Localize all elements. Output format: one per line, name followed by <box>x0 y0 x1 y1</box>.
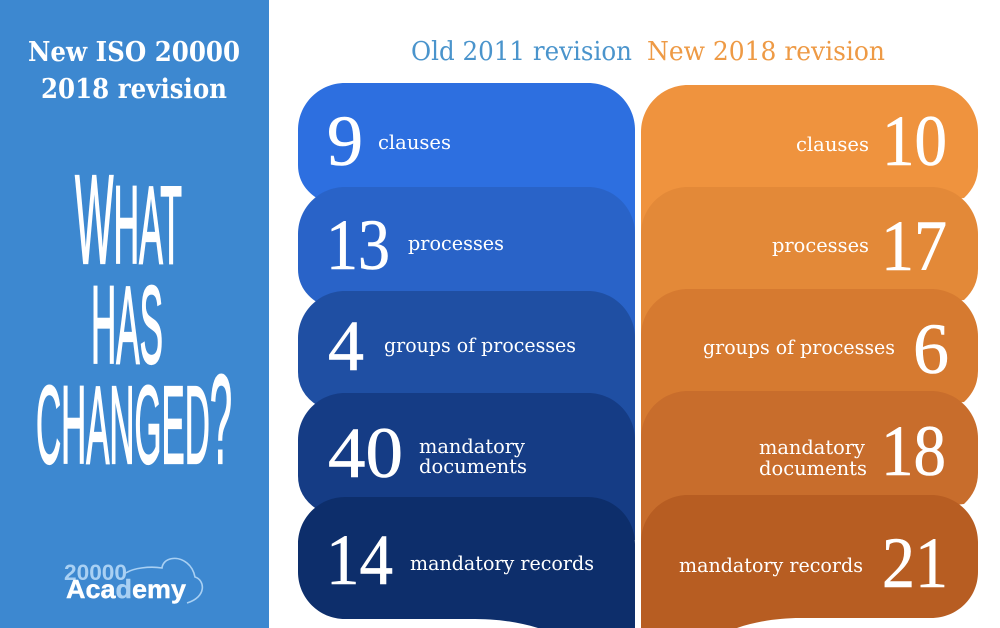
tile: 40 mandatory documents: mandatory <box>419 435 525 458</box>
heading: What has changed? <box>36 149 232 490</box>
tile: 21 mandatory records <box>641 495 978 628</box>
tile: 40 mandatory documents: 40 <box>328 413 403 493</box>
tile: 18 mandatory documents: documents <box>759 457 867 480</box>
tile: 9 clauses: 9 <box>327 101 363 181</box>
tile: 10 clauses: clauses <box>796 133 869 156</box>
title: New ISO 20000 2018 revision <box>28 37 240 105</box>
tile: 10 clauses: 10 <box>882 101 947 181</box>
panel: old revision column <box>298 83 635 628</box>
tile: 17 processes: 17 <box>881 206 947 286</box>
tile: 9 clauses <box>298 83 635 240</box>
tile: 40 mandatory documents: documents <box>419 455 527 478</box>
tile: 18 mandatory documents: 18 <box>881 411 946 491</box>
logo: 20000 Academy: 20000 <box>64 560 127 585</box>
tile: 21 mandatory records: mandatory records <box>679 554 863 577</box>
tile: 14 mandatory records <box>298 497 635 628</box>
text: CHANGED? <box>36 349 232 490</box>
tile: 21 mandatory records: 21 <box>882 523 948 603</box>
panel: new revision column <box>641 85 978 628</box>
tile: 4 groups of processes: 4 <box>328 306 364 386</box>
tile: 18 mandatory documents: mandatory <box>759 436 865 459</box>
heading: What has changed?: WHAT <box>75 149 182 290</box>
logo: 20000 Academy: Academy <box>66 574 187 604</box>
tile: 6 groups of processes: groups of processes <box>703 336 895 359</box>
tile: 13 processes: 13 <box>326 205 390 285</box>
title: New ISO 20000 2018 revision: New ISO 20000 <box>28 37 240 68</box>
tile: 40 mandatory documents <box>298 393 635 540</box>
tile: 4 groups of processes: groups of processes <box>384 334 576 357</box>
tile: 14 mandatory records: mandatory records <box>410 552 594 575</box>
tile: 9 clauses: clauses <box>378 131 451 154</box>
tile: 18 mandatory documents <box>641 391 978 540</box>
tile: 6 groups of processes: 6 <box>913 309 949 389</box>
tile: 13 processes: processes <box>408 232 504 255</box>
tile: 4 groups of processes <box>298 291 635 440</box>
tile: 6 groups of processes <box>641 289 978 440</box>
tile: 14 mandatory records: 14 <box>326 520 393 600</box>
tile: 17 processes <box>641 187 978 340</box>
panel: left sidebar <box>0 0 269 628</box>
heading: What has changed?: HAS <box>91 264 163 387</box>
heading: Old 2011 revision: Old 2011 revision <box>411 37 632 67</box>
tile: 17 processes: processes <box>772 234 869 257</box>
logo: 20000 Academy <box>64 558 202 604</box>
heading: New 2018 revision: New 2018 revision <box>647 37 885 67</box>
title: New ISO 20000 2018 revision: 2018 revision <box>41 74 227 105</box>
tile: 13 processes <box>298 187 635 340</box>
tile: 10 clauses <box>641 85 978 240</box>
